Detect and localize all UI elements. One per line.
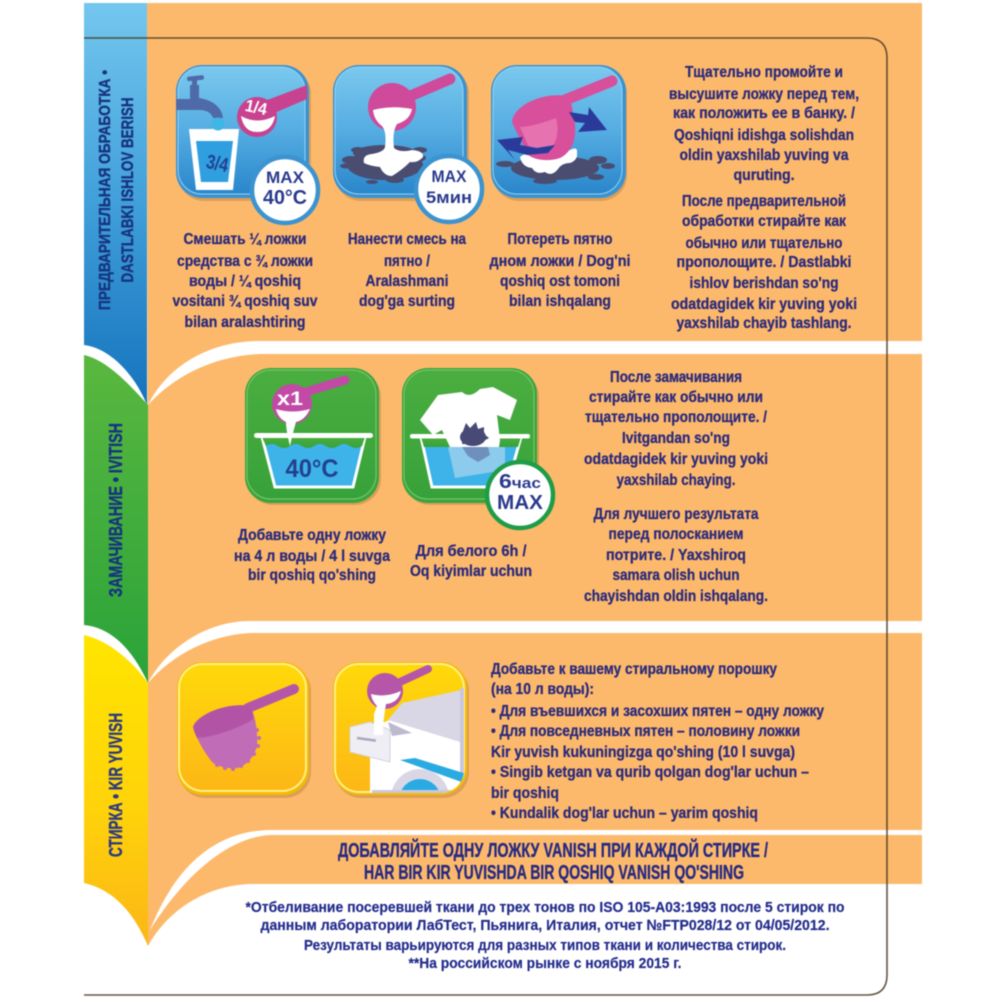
caption: apply: пятно / bbox=[384, 253, 431, 270]
tab: washing yellow bbox=[84, 635, 148, 946]
text block: dosage: • Для въевшихся и засохших пятен – одну ложку bbox=[491, 703, 824, 720]
text block: rinse spoon and wash: ishlov berishdan so'ng bbox=[690, 275, 838, 292]
badge: 6 hours max: MAX bbox=[497, 492, 544, 514]
text block: dosage: • Kundalik dog'lar uchun – yarim qoshiq bbox=[491, 805, 758, 822]
text block: dosage: • Singib ketgan va qurib qolgan dog'lar uchun – bbox=[491, 764, 809, 781]
section: pre-treatment bbox=[172, 64, 859, 332]
text block: rinse spoon and wash: odatdagidek kir yuving yoki bbox=[671, 296, 857, 313]
icon: basin 40C with one spoon bbox=[245, 368, 381, 505]
footnotes bbox=[246, 899, 844, 972]
text block: rinse spoon and wash: quruting. bbox=[734, 167, 794, 184]
text block: rinse spoon and wash: прополощите. / Dastlabki bbox=[676, 254, 852, 271]
caption: for whites bbox=[410, 543, 532, 580]
white swoosh divider 2 bbox=[148, 621, 922, 683]
text block: after soaking: тщательно прополощите. / bbox=[585, 409, 768, 426]
text block: rinse spoon and wash: Qoshiqni idishga solishdan bbox=[674, 127, 854, 144]
icon: basin 40C with one spoon: x1 bbox=[277, 389, 304, 410]
badge: max 5 min: 5мин bbox=[426, 188, 472, 207]
text block: after soaking: odatdagidek kir yuving yoki bbox=[584, 451, 768, 468]
text block: after soaking: yaxshilab chaying. bbox=[616, 472, 736, 489]
caption: for whites: Для белого 6h / bbox=[416, 543, 527, 560]
text block: after soaking: Для лучшего результата bbox=[594, 506, 759, 523]
footnotes: данным лаборатории ЛабТест, Пьянига, Италия, отчет №FTP028/12 от 04/05/2012. bbox=[260, 917, 830, 934]
tab: washing yellow: СТИРКА • KIR YUVISH bbox=[106, 713, 126, 857]
section: washing bbox=[177, 661, 824, 827]
caption: rub: Потереть пятно bbox=[508, 231, 612, 248]
tab: pre-treatment blue: DASTLABKI ISHLOV BERISH bbox=[119, 98, 137, 282]
caption: for whites: Oq kiyimlar uchun bbox=[410, 563, 532, 580]
tab: pre-treatment blue: ПРЕДВАРИТЕЛЬНАЯ ОБРАБОТКА • bbox=[97, 70, 114, 310]
caption: apply: Aralashmani bbox=[366, 273, 448, 290]
text block: after soaking: chayishdan oldin ishqalang. bbox=[584, 588, 768, 605]
badge: max 5 min bbox=[416, 156, 482, 222]
badge: 6 hours max bbox=[487, 462, 553, 528]
badge: max 40C: 40°C bbox=[263, 187, 307, 209]
text block: dosage: • Для повседневных пятен – половину ложки bbox=[491, 723, 800, 740]
caption: mix: средства с ¾ ложки bbox=[177, 253, 313, 270]
icon: mixing water and powder bbox=[176, 65, 311, 201]
caption: add spoon bbox=[234, 527, 390, 584]
text block: dosage: Добавьте к вашему стиральному порошку bbox=[491, 661, 777, 678]
section: soaking bbox=[234, 368, 768, 605]
caption: apply bbox=[348, 231, 466, 310]
icon: t-shirt soaking in basin bbox=[402, 368, 539, 505]
badge: 6 hours max: 6час bbox=[499, 471, 541, 493]
icon: rub stain with spoon bbox=[491, 65, 627, 201]
text block: rinse spoon and wash: высушите ложку перед тем, bbox=[669, 86, 859, 103]
text block: rinse spoon and wash: обычно или тщательно bbox=[686, 235, 842, 252]
badge: max 40C bbox=[252, 157, 318, 223]
badge: max 5 min: MAX bbox=[432, 167, 467, 186]
caption: add spoon: bir qoshiq qo'shing bbox=[248, 567, 376, 584]
caption: mix: vositani ¾ qoshiq suv bbox=[172, 293, 318, 310]
caption: apply: dog'ga surting bbox=[359, 293, 455, 310]
caption: apply: Нанести смесь на bbox=[348, 231, 466, 248]
orange background panel bbox=[147, 3, 922, 946]
icon: mixing water and powder: 1/4 bbox=[243, 96, 269, 119]
text block: dosage bbox=[491, 661, 824, 822]
text block: rinse spoon and wash: yaxshilab chayib tashlang. bbox=[676, 315, 852, 332]
caption: add spoon: на 4 л воды / 4 l suvga bbox=[234, 548, 390, 565]
heading: add one spoon of Vanish every wash: ДОБАВЛЯЙТЕ ОДНУ ЛОЖКУ VANISH ПРИ КАЖДОЙ СТИРКЕ / bbox=[338, 838, 768, 862]
heading: add one spoon of Vanish every wash: HAR BIR KIR YUVISHDA BIR QOSHIQ VANISH QO'SHING bbox=[364, 862, 744, 884]
text block: dosage: (на 10 л воды): bbox=[491, 681, 594, 698]
caption: rub bbox=[490, 231, 630, 310]
icon: spoon with powder bbox=[177, 662, 311, 798]
white swoosh divider 3 bbox=[150, 830, 922, 930]
caption: mix bbox=[172, 231, 318, 331]
icon: mixing water and powder: 3/4 bbox=[204, 151, 231, 177]
text block: rinse spoon and wash bbox=[669, 64, 859, 332]
text block: after soaking: потрите. / Yaxshiroq bbox=[606, 547, 746, 564]
caption: rub: qoshiq ost tomoni bbox=[500, 273, 620, 290]
footnotes: Результаты варьируются для разных типов ткани и количества стирок. bbox=[304, 937, 786, 954]
footnotes: *Отбеливание посеревшей ткани до трех тонов по ISO 105-A03:1993 после 5 стирок по bbox=[246, 899, 844, 916]
text block: after soaking: перед полосканием bbox=[608, 526, 744, 543]
caption: rub: дном ложки / Dog'ni bbox=[490, 253, 630, 270]
text block: rinse spoon and wash: как положить ее в банку. / bbox=[673, 105, 856, 122]
text block: dosage: bir qoshiq bbox=[491, 785, 559, 802]
text block: after soaking: samara olish uchun bbox=[612, 567, 740, 584]
icon: powder into washing machine bbox=[332, 661, 470, 798]
tab: soaking green: ЗАМАЧИВАНИЕ • IVITISH bbox=[106, 423, 126, 597]
caption: mix: Смешать ¼ ложки bbox=[184, 231, 306, 248]
icon: apply mixture to stain bbox=[333, 65, 469, 201]
caption: mix: воды / ¼ qoshiq bbox=[189, 273, 301, 290]
text block: rinse spoon and wash: oldin yaxshilab yuving va bbox=[680, 147, 849, 164]
caption: add spoon: Добавьте одну ложку bbox=[238, 527, 386, 544]
package outline bbox=[84, 38, 887, 995]
text block: dosage: Kir yuvish kukuningizga qo'shing (10 l suvga) bbox=[491, 744, 795, 761]
text block: rinse spoon and wash: обработки стирайте как bbox=[682, 213, 846, 230]
white swoosh divider 1 bbox=[148, 341, 922, 405]
heading: add one spoon of Vanish every wash bbox=[338, 838, 768, 884]
text block: after soaking: стирайте как обычно или bbox=[589, 389, 763, 406]
tab: pre-treatment blue bbox=[84, 3, 147, 405]
text block: after soaking bbox=[584, 369, 768, 605]
text block: rinse spoon and wash: После предварительной bbox=[682, 193, 846, 210]
icon: basin 40C with one spoon: 40°C bbox=[286, 455, 338, 483]
badge: max 40C: MAX bbox=[266, 168, 305, 187]
tab: soaking green bbox=[84, 355, 148, 683]
text block: rinse spoon and wash: Тщательно промойте и bbox=[685, 64, 843, 81]
caption: mix: bilan aralashtiring bbox=[184, 314, 306, 331]
text block: after soaking: Ivitgandan so'ng bbox=[622, 430, 730, 447]
caption: rub: bilan ishqalang bbox=[509, 293, 611, 310]
text block: after soaking: После замачивания bbox=[610, 369, 742, 386]
footnotes: **На российском рынке с ноября 2015 г. bbox=[408, 955, 682, 972]
